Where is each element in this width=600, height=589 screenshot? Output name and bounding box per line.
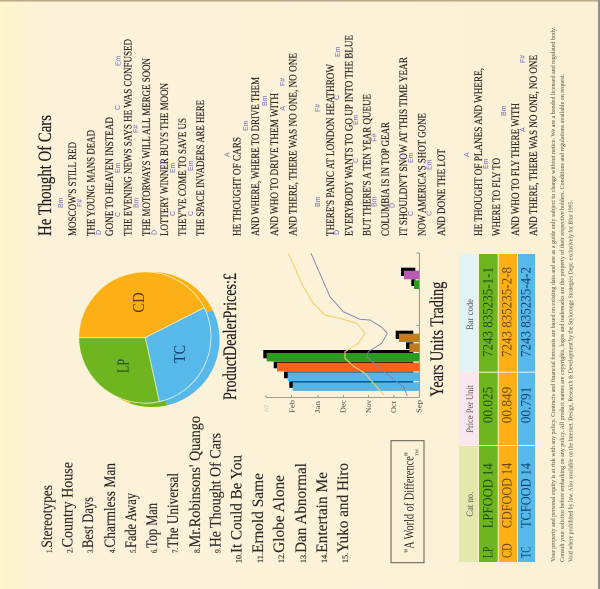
- lyrics: verse 1: C: [115, 105, 122, 110]
- table row: LP: 00.025: [480, 387, 496, 423]
- lyrics: verse 2: BUT THERE'S A TEN YEAR QUEUE: [361, 94, 374, 236]
- table: catalogue: [459, 254, 535, 562]
- axis labels: Oct: [389, 400, 398, 413]
- table row: TC: 7243 835235-4-2: [519, 267, 535, 357]
- table header: Bar code: [465, 299, 475, 330]
- lyrics: chorus 1: HE THOUGHT OF CARS: [231, 137, 244, 236]
- table row: CD: CD: [500, 543, 516, 558]
- table row: CD: CDFOOD 14: [500, 462, 516, 528]
- track list: 7.The Universal: [165, 473, 182, 553]
- footnote: small print: Void where prohibited by law. Also available on the Internet. Design, Research & Development by the Stylorouge Strategies Dept. exclusively for Blur 1995.: [568, 199, 575, 562]
- table row: LP: [479, 254, 498, 562]
- lyrics: chorus 2: HE THOUGHT OF PLANES AND WHERE,: [472, 68, 485, 236]
- table row: CD: 7243 835235-2-8: [500, 267, 516, 357]
- footnote: small print: Your property and personal equity is at risk with any policy. Contracts and financial forecasts are based on existing data and are as a guide only subject to change without notice. We are a bonded licensed and regulated body.: [550, 26, 557, 562]
- track list: 9.He Thought Of Cars: [208, 433, 225, 553]
- table row: TC: TC: [519, 547, 535, 558]
- lyrics: verse 1: THE MOTORWAYS WILL ALL MERGE SOON: [140, 58, 153, 236]
- lyrics: chorus 1: Bm: [262, 95, 269, 106]
- bar and line chart: [262, 253, 424, 413]
- lyrics: verse 2: Em: [335, 46, 342, 57]
- lyrics: verse 2: THERE'S PANIC AT LONDON HEATHROW: [324, 64, 337, 236]
- track list: 14.Entertain Me: [314, 472, 331, 563]
- lyrics: verse 2: [315, 35, 448, 236]
- lyrics: chorus 1: A: [224, 152, 231, 157]
- lyrics: verse 2: D: [390, 203, 397, 208]
- track list: 11.Ernold Same: [250, 473, 267, 563]
- pie slice: LP: [79, 338, 159, 403]
- lyrics: verse 2: Em: [353, 114, 360, 125]
- lyrics: chorus 1: A: [280, 106, 287, 111]
- lyrics: chorus 2: Bm: [501, 105, 508, 116]
- lyrics: verse 1: THEY'VE COME TO SAVE US: [176, 118, 189, 236]
- heading: He Thought Of Cars: He Thought Of Cars: [36, 115, 56, 236]
- lyrics: verse 2: Bm: [372, 196, 379, 207]
- heading: Years Units Trading: Years Units Trading: [428, 282, 448, 397]
- lyrics: verse 2: C: [408, 211, 415, 216]
- lyrics: chorus 1: [224, 53, 300, 236]
- table row: LP: 7243 835235-1-1: [480, 267, 496, 357]
- lyrics: chorus 1: AND WHO TO DRIVE THEM WITH: [268, 93, 281, 236]
- table header: Price Per Unit: [465, 385, 475, 433]
- lyrics: chorus 2: WHERE TO FLY TO: [490, 158, 503, 236]
- lyrics: verse 1: Em: [188, 160, 195, 171]
- axis labels: Feb: [288, 400, 296, 413]
- lyrics: chorus 2: [464, 55, 540, 236]
- chart bars: [263, 268, 419, 391]
- axis labels: ///: [262, 404, 271, 412]
- lyrics: verse 1: Em: [170, 162, 177, 173]
- lyrics: verse 2: C: [353, 158, 360, 163]
- lyrics: verse 1: D: [96, 230, 103, 235]
- track list: [39, 416, 352, 563]
- table header: [459, 254, 478, 562]
- lyrics: chorus 2: Em: [483, 158, 490, 169]
- track list: 4.Charmless Man: [102, 463, 119, 553]
- track list: 13.Dan Abnormal: [293, 462, 310, 563]
- axis labels: [262, 399, 424, 413]
- track list: 3.Best Days: [80, 497, 97, 553]
- lyrics: verse 1: GONE TO HEAVEN INSTEAD: [103, 117, 116, 236]
- track list: 2.Country House: [60, 462, 77, 553]
- line: blue trend: [311, 253, 407, 396]
- pie label: TC: TC: [170, 345, 189, 363]
- pie label: CD: CD: [129, 292, 148, 313]
- lyrics: verse 2: C: [334, 95, 341, 100]
- callout: A World of Difference: "A World of Difference": [402, 452, 417, 553]
- lyrics: chorus 1: AND THERE, THERE WAS NO ONE, NO ONE: [287, 53, 300, 236]
- lyrics: verse 1: Bm: [134, 197, 141, 208]
- callout: A World of Difference: TM: [414, 449, 420, 456]
- table row: CD: 00.849: [500, 387, 516, 423]
- lyrics: verse 1: C: [170, 211, 177, 216]
- lyrics: chorus 2: AND WHO TO FLY THERE WITH: [509, 103, 522, 236]
- lyrics: verse 1: C: [188, 211, 195, 216]
- lyrics: chorus 1: Em: [243, 120, 250, 131]
- lyrics: verse 1: C: [115, 212, 122, 217]
- lyrics: verse 1: F#: [77, 199, 84, 207]
- lyrics: verse 2: F#: [315, 104, 322, 112]
- lyrics: verse 2: D: [334, 230, 341, 235]
- table row: TC: 00.791: [519, 387, 535, 423]
- lyrics: verse 2: Em: [408, 152, 415, 163]
- track list: 8.Mr.Robinsons' Quango: [187, 416, 204, 553]
- callout: A World of Difference: [391, 441, 424, 563]
- axis labels: Nov: [364, 400, 373, 413]
- table row: TC: [518, 254, 535, 562]
- lyrics: verse 2: AND DONE THE LOT: [435, 149, 448, 236]
- lyrics: chorus 2: F#: [520, 55, 527, 63]
- track list: 5.Fade Away: [123, 493, 140, 553]
- axis labels: Sep: [414, 400, 424, 413]
- track list: 10.It Could Be You: [229, 455, 246, 563]
- table row: CD: [499, 254, 517, 562]
- track list: 12.Globe Alone: [271, 475, 288, 563]
- axis labels: Dec: [338, 399, 348, 413]
- axis labels: Jan: [313, 401, 322, 413]
- lyrics: verse 1: F#: [133, 125, 140, 133]
- pie slice: CD: [79, 272, 204, 338]
- lyrics: verse 2: C: [427, 211, 434, 216]
- table header: Cat no.: [465, 492, 475, 517]
- chart axes: [266, 253, 419, 397]
- lyrics: chorus 2: A: [520, 127, 527, 132]
- line: yellow trend: [288, 253, 384, 395]
- lyrics: verse 1: Em: [115, 162, 122, 173]
- lyrics: verse 2: IT SHOULDN'T SNOW AT THIS TIME YEAR: [397, 57, 410, 236]
- table row: LP: LPFOOD 14: [480, 463, 496, 528]
- lyrics: chorus 1: AND WHERE, WHERE TO DRIVE THEM: [249, 77, 262, 236]
- lyrics: verse 1: THE SPACE INVADERS ARE HERE: [194, 100, 207, 236]
- lyrics: verse 2: Em: [427, 159, 434, 170]
- table row: LP: LP: [480, 547, 496, 558]
- heading: Product Dealer Prices: ProductDealerPrices:£: [221, 273, 241, 400]
- pie slice: TC: [145, 308, 211, 402]
- footnote: small print: Consult your solicitor before embarking on any policy. All product names are copyrights, logos and trademarks are the property of their respective holders. Conditions and regulations available on request.: [559, 73, 566, 562]
- lyrics: verse 2: COLUMBIA IS IN TOP GEAR: [379, 122, 392, 236]
- lyrics: verse 2: Bm: [315, 196, 322, 207]
- lyrics: chorus 2: A: [464, 152, 471, 157]
- lyrics: verse 1: LOTTERY WINNER BUYS THE MOON: [158, 83, 171, 236]
- lyrics: verse 2: F#: [372, 133, 379, 142]
- lyrics: verse 1: MOSCOW'S STILL RED: [66, 142, 79, 236]
- footnote: small print: [550, 26, 575, 562]
- lyrics: verse 2: NOW AMERICA'S SHOT GONE: [416, 113, 429, 236]
- lyrics: verse 1: Em: [116, 55, 122, 66]
- pie label: LP: LP: [113, 359, 132, 373]
- lyrics: verse 1: THE YOUNG MANS DEAD: [85, 130, 98, 236]
- pie chart: [78, 272, 220, 407]
- track list: 1.Stereotypes: [39, 485, 56, 553]
- lyrics: verse 1: Bm: [58, 197, 65, 208]
- table row: TC: TCFOOD 14: [519, 463, 535, 528]
- lyrics: chorus 1: F#: [280, 78, 287, 86]
- lyrics: verse 1: D: [152, 230, 159, 235]
- track list: 15.Yuko and Hiro: [335, 463, 352, 563]
- lyrics: chorus 2: AND THERE, THERE WAS NO ONE, NO ONE: [527, 55, 540, 236]
- track list: 6.Top Man: [144, 503, 161, 553]
- lyrics: verse 1: [58, 39, 207, 236]
